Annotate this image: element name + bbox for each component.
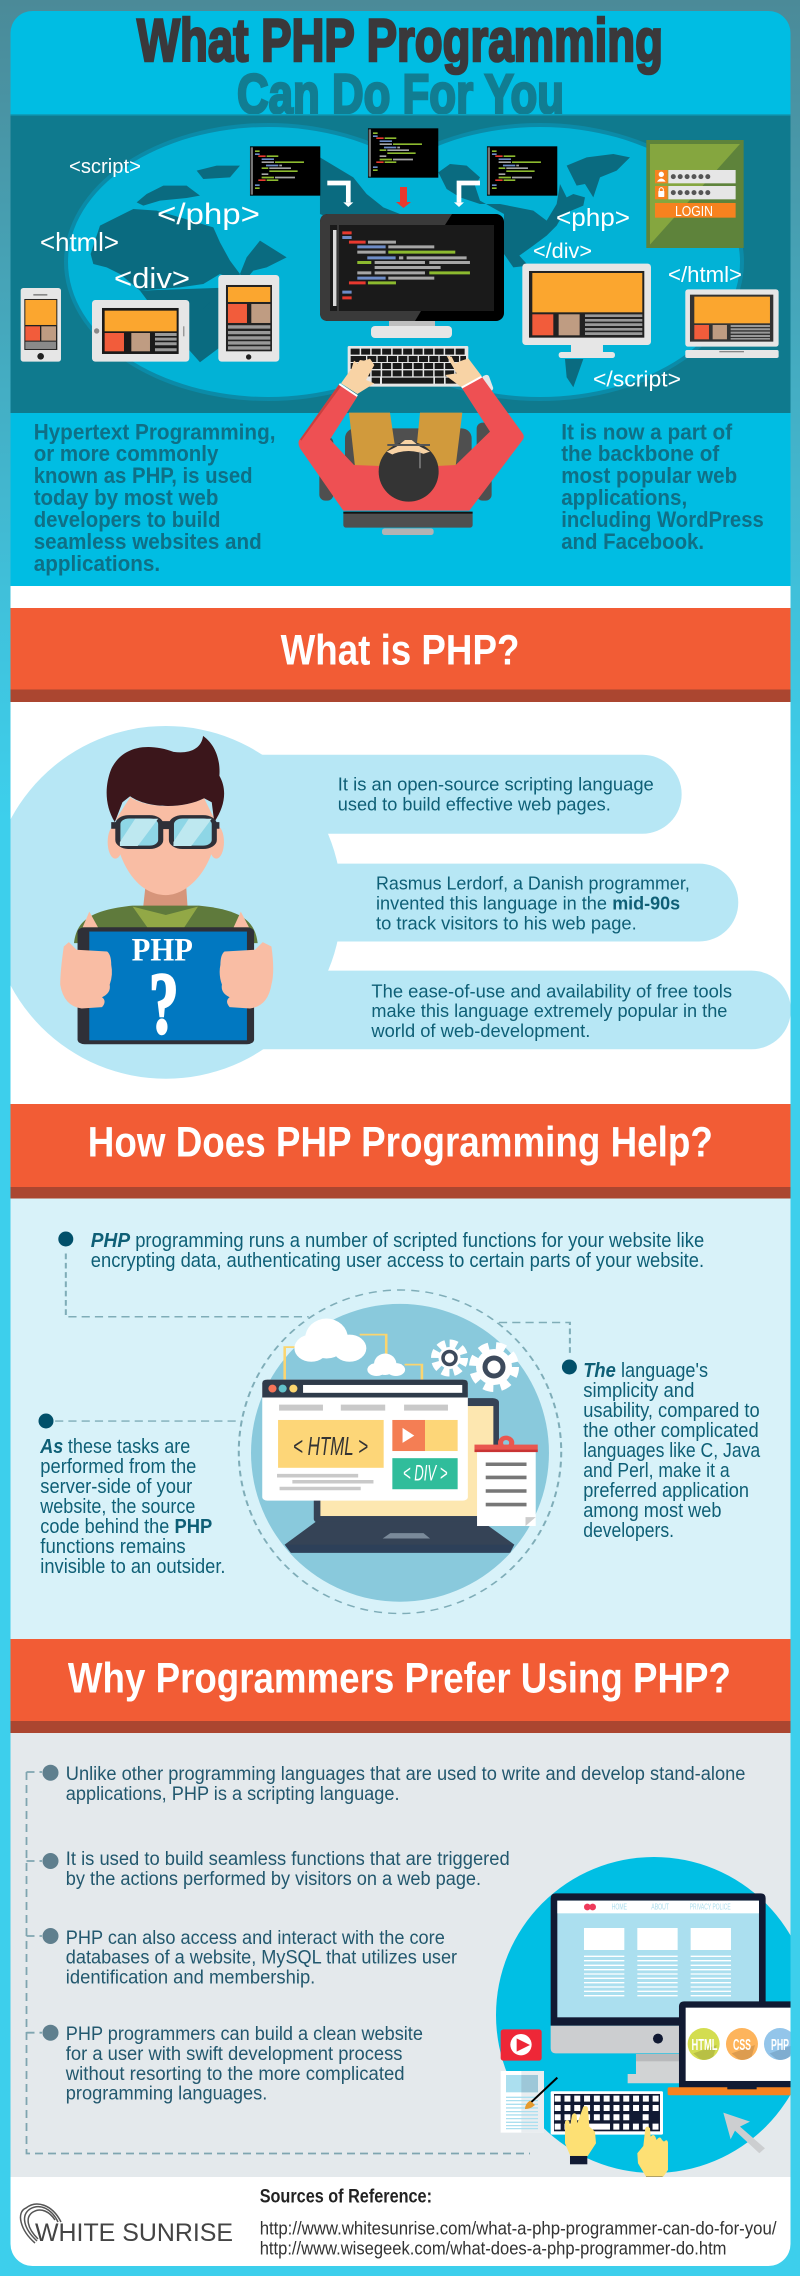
arrow: right white xyxy=(454,183,480,207)
right hand xyxy=(637,2127,668,2179)
footer xyxy=(10,2177,791,2267)
face xyxy=(116,797,214,895)
main monitor xyxy=(320,214,504,338)
bullet and text: left: PHP xyxy=(174,1516,212,1538)
bullet and text: top: programming runs a number of scripted functions for your website like xyxy=(135,1230,704,1252)
right hand xyxy=(220,942,273,1008)
intro text left: applications. xyxy=(34,551,160,576)
tag: </div> xyxy=(533,240,592,263)
dashed tree connector xyxy=(26,1772,530,2154)
bullet and text: left xyxy=(38,1414,226,1578)
sources heading: Sources of Reference: xyxy=(260,2187,432,2208)
heading band: What is PHP xyxy=(10,608,791,702)
footer background xyxy=(10,2177,791,2267)
tablet label: PHP xyxy=(132,932,193,968)
device: laptop xyxy=(685,289,779,358)
intro text right: including WordPress xyxy=(561,507,764,532)
intro text left: developers to build xyxy=(34,507,220,532)
bubble text 2: to track visitors to his web page. xyxy=(376,913,637,933)
circle backdrop xyxy=(496,1857,800,2173)
title line 2: Can Do For You xyxy=(237,62,564,125)
bubble text 1: It is an open-source scripting language xyxy=(338,775,654,795)
bubble text 3: make this language extremely popular in the xyxy=(371,1001,727,1021)
character: programmer with tablet xyxy=(60,736,273,1044)
item 1: Unlike other programming languages that are used to write and develop stand-alone xyxy=(66,1764,745,1785)
ears xyxy=(108,825,123,859)
chair back rest xyxy=(343,512,473,528)
cuffs xyxy=(339,377,482,396)
source links: http://www.wisegeek.com/what-does-a-php-programmer-do.htm xyxy=(260,2239,726,2259)
laptop xyxy=(668,2001,796,2095)
intro text left xyxy=(34,419,276,576)
browser HTML label: < HTML > xyxy=(293,1431,368,1461)
bullet and text: right xyxy=(562,1360,761,1542)
heading band: How Does PHP Programming Help xyxy=(10,1104,791,1198)
bubble text 1: used to build effective web pages. xyxy=(338,795,611,815)
tag: </php> xyxy=(157,198,260,231)
source links: http://www.whitesunrise.com/what-a-php-programmer-can-do-for-you/ xyxy=(260,2218,776,2238)
bullet and text: right: languages like C, Java xyxy=(583,1440,761,1462)
cloud large xyxy=(294,1319,366,1362)
logo swoosh xyxy=(20,2204,61,2243)
bullet and text: right: preferred application xyxy=(583,1480,749,1502)
neck xyxy=(143,887,188,915)
intro text right: applications, xyxy=(561,485,687,510)
tag: <div> xyxy=(114,263,190,295)
chair xyxy=(319,423,492,501)
tech badges: CSS xyxy=(733,2037,751,2054)
monitor nav labels xyxy=(612,1903,731,1912)
bubble text 1 xyxy=(338,775,654,815)
section: why programmers background xyxy=(10,1733,791,2177)
item 2 xyxy=(66,1849,510,1890)
bubble text 3: world of web-development. xyxy=(370,1021,590,1041)
speech bubble blob xyxy=(0,726,791,1079)
band xyxy=(10,114,791,413)
gear small xyxy=(436,1344,464,1372)
browser window xyxy=(262,1380,468,1501)
heading band: How Does PHP Programming Help: How Does PHP Programming Help? xyxy=(88,1118,713,1166)
clipboard note xyxy=(474,1436,538,1526)
item 4: programming languages. xyxy=(66,2084,267,2105)
bullet and text: right: among most web xyxy=(583,1500,722,1522)
laptop xyxy=(285,1398,514,1553)
item 2: It is used to build seamless functions that are triggered xyxy=(66,1849,510,1870)
intro text left: today by most web xyxy=(34,485,218,510)
heading band: What is PHP: What is PHP? xyxy=(281,627,519,675)
continents right xyxy=(438,154,630,387)
watch xyxy=(482,374,494,391)
shirt xyxy=(74,906,258,943)
bullet and text: right: usability, compared to xyxy=(583,1400,760,1422)
hands xyxy=(341,356,482,394)
heading band: Why Programmers Prefer Using PHP xyxy=(10,1639,791,1733)
device: portrait tablet xyxy=(218,275,279,362)
item 4 xyxy=(65,2024,423,2105)
hair xyxy=(107,736,224,822)
bullet and text: right: the other complicated xyxy=(583,1420,759,1442)
code window: small editors xyxy=(250,128,557,196)
tag: </script> xyxy=(593,366,681,392)
bullet and text: top xyxy=(58,1230,704,1272)
device: phone xyxy=(21,288,61,362)
yellow cloud wires xyxy=(285,1335,422,1380)
continents left xyxy=(91,157,400,362)
document xyxy=(501,2071,544,2133)
monitor stand xyxy=(389,321,435,326)
bullet and text: left: these tasks are xyxy=(68,1436,190,1458)
bubble text 2: mid-90s xyxy=(612,893,680,913)
legs xyxy=(349,413,462,467)
dashed ring xyxy=(239,1290,561,1614)
laptop and cloud illustration xyxy=(55,1254,570,1614)
connector lines xyxy=(55,1254,570,1421)
floating code tags xyxy=(40,156,742,392)
device: landscape tablet xyxy=(92,300,189,362)
web development illustration xyxy=(496,1857,800,2179)
left hand xyxy=(60,942,112,1008)
item 4: without resorting to the more complicated xyxy=(65,2064,405,2085)
item 3: databases of a website, MySQL that utilizes user xyxy=(66,1948,458,1969)
monitor nav labels: ABOUT xyxy=(651,1903,669,1912)
bullet and text: right: The xyxy=(583,1360,616,1382)
arrows into main monitor xyxy=(327,183,480,208)
source links xyxy=(260,2218,776,2259)
bullet and text: left: server-side of your xyxy=(40,1476,193,1498)
browser DIV label: < DIV > xyxy=(403,1461,448,1486)
logo wordmark: WHITE SUNRISE xyxy=(35,2219,233,2247)
gears xyxy=(436,1344,514,1387)
intro text left: known as PHP, is used xyxy=(34,463,253,488)
item 3 xyxy=(66,1928,458,1989)
sweater xyxy=(298,377,524,511)
item 2: by the actions performed by visitors on a web page. xyxy=(66,1869,481,1890)
intro text right xyxy=(561,419,764,554)
item 3: PHP can also access and interact with the core xyxy=(66,1928,445,1949)
login card xyxy=(646,140,744,248)
bubble text 2: invented this language in the xyxy=(376,893,607,913)
bullets xyxy=(42,1765,58,2041)
arrow: centre red xyxy=(396,187,411,208)
desktop monitor xyxy=(551,1893,766,2083)
intro text right: It is now a part of xyxy=(561,419,733,444)
bullet and text: left: invisible to an outsider. xyxy=(40,1556,225,1578)
monitor nav labels: HOME xyxy=(612,1903,627,1912)
intro text left: or more commonly xyxy=(34,441,219,466)
bullet and text: left: code behind the xyxy=(40,1516,169,1538)
bubble text 3: The ease-of-use and availability of free tools xyxy=(371,981,732,1001)
circle backdrop xyxy=(251,1304,549,1602)
tech badges: HTML xyxy=(692,2037,718,2054)
monitor code lines xyxy=(342,231,470,299)
paint brush xyxy=(525,2078,557,2109)
tag: <php> xyxy=(556,204,630,232)
gear large xyxy=(474,1347,514,1387)
head xyxy=(379,442,439,502)
globe left and right xyxy=(64,123,368,401)
item 1 xyxy=(66,1764,745,1805)
cloud small xyxy=(367,1354,405,1376)
tech badges xyxy=(692,2037,789,2054)
intro text right: and Facebook. xyxy=(561,529,704,554)
thumbs xyxy=(83,912,249,927)
tag: <html> xyxy=(40,227,119,257)
arrow: left white xyxy=(327,183,353,207)
logo: White Sunrise xyxy=(20,2204,233,2247)
bubble text 2: Rasmus Lerdorf, a Danish programmer, xyxy=(376,874,690,894)
glasses xyxy=(111,817,219,847)
intro text right: the backbone of xyxy=(561,441,720,466)
keyboard xyxy=(348,346,468,387)
intro text left: seamless websites and xyxy=(34,529,262,554)
section background: hero cyan xyxy=(10,11,791,587)
item 4: PHP programmers can build a clean website xyxy=(66,2024,423,2045)
section: what is PHP background xyxy=(10,586,791,1105)
item 1: applications, PHP is a scripting language. xyxy=(66,1784,400,1805)
devices and hands xyxy=(501,1893,796,2179)
login label: LOGIN xyxy=(675,203,713,220)
monitor nav labels: PRIVACY POLICE xyxy=(690,1903,731,1912)
bullet and text: right: language's xyxy=(621,1360,708,1382)
intro text right: most popular web xyxy=(561,463,737,488)
bullet and text: right: developers. xyxy=(583,1520,674,1542)
section: how does PHP help background xyxy=(10,1197,791,1640)
bullet and text: right: simplicity and xyxy=(583,1380,694,1402)
intro text left: Hypertext Programming, xyxy=(34,419,276,444)
title xyxy=(136,16,661,114)
bubble text 3 xyxy=(370,981,732,1041)
bullet list xyxy=(42,1764,745,2105)
hero band with world map xyxy=(10,114,791,413)
bullet and text: left: performed from the xyxy=(40,1456,196,1478)
video icon xyxy=(501,2029,542,2061)
bullet and text: top: encrypting data, authenticating user access to certain parts of your website. xyxy=(91,1250,704,1272)
device: desktop xyxy=(522,264,651,358)
bullet and text: left: website, the source xyxy=(39,1496,195,1518)
tablet xyxy=(78,927,254,1044)
bullet and text: top: PHP xyxy=(91,1230,131,1252)
item 3: identification and membership. xyxy=(66,1968,315,1989)
tag: </html> xyxy=(668,262,742,287)
tag: <script> xyxy=(69,156,141,178)
programmer at keyboard xyxy=(298,346,524,535)
bullet and text: right: and Perl, make it a xyxy=(583,1460,730,1482)
bubble text 2 xyxy=(376,874,690,933)
tablet question mark: ? xyxy=(149,956,179,1053)
item 4: for a user with swift development process xyxy=(66,2044,403,2065)
bullet and text: left: As xyxy=(39,1436,63,1458)
keyboard xyxy=(551,2091,663,2135)
bullet and text: left: functions remains xyxy=(40,1536,186,1558)
cursor arrow xyxy=(723,2113,765,2153)
left hand xyxy=(565,2106,596,2164)
